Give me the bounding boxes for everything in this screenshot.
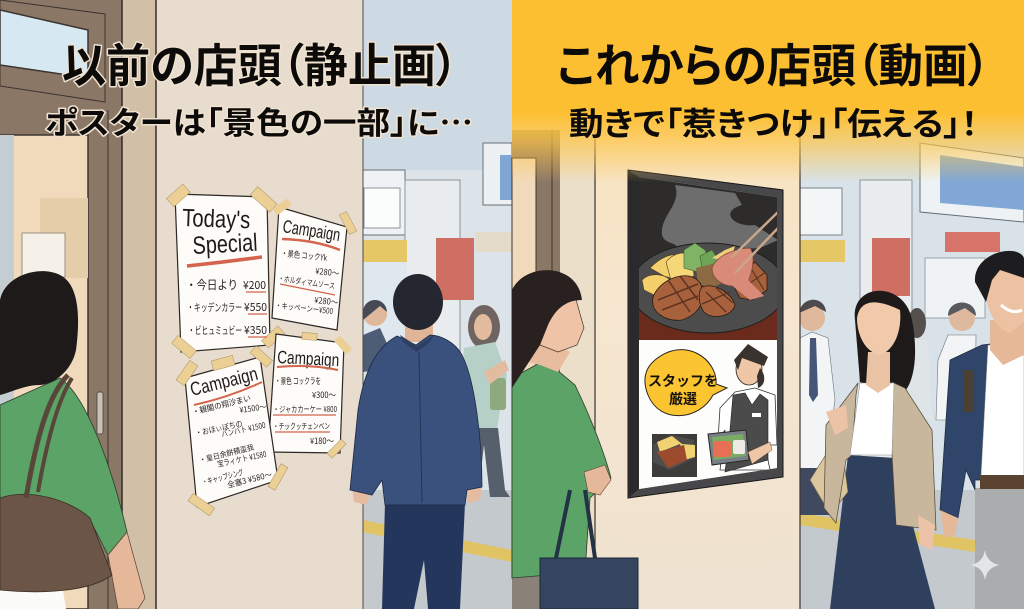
wall left xyxy=(156,0,363,609)
poster: Today's Special: ¥350 xyxy=(244,322,267,338)
title: future storefront: これからの店頭（動画） xyxy=(557,30,990,96)
video: staff recommendation xyxy=(639,340,777,490)
poster: Campaign lower right: ・ジャカカーケー ¥800 xyxy=(273,404,337,415)
door column xyxy=(122,0,156,609)
poster: Campaign lower right: Campaign xyxy=(277,347,340,370)
panel: future storefront (right) xyxy=(512,0,1024,609)
yellow header band xyxy=(512,0,1024,182)
poster: Today's Special: ・キッデンカラー xyxy=(187,300,242,315)
poster: Campaign bottom left: ・キャップシング xyxy=(201,467,244,488)
poster: Campaign bottom left: ・おほぃぼちの xyxy=(194,418,244,439)
poster: Campaign bottom left: ・親閣の翔沙まい xyxy=(191,393,252,418)
digital signage screen xyxy=(628,169,784,499)
poster: Today's Special: ・ビヒュミュビー xyxy=(188,323,242,338)
subtitle: previous storefront: ポスターは「景色の一部」に… xyxy=(45,98,473,143)
poster: Campaign top right: Campaign xyxy=(281,216,342,245)
poster: Campaign lower right: ・チックッチェンベン xyxy=(273,421,330,432)
station background right xyxy=(800,0,1024,609)
poster: Today's Special: ¥200 xyxy=(243,277,266,293)
woman in green cardigan looking at screen xyxy=(512,270,638,609)
title: previous storefront: 以前の店頭（静止画） xyxy=(62,30,458,96)
poster: Campaign top right: ・景色 コックYk xyxy=(281,247,328,264)
poster: Today's Special: ¥550 xyxy=(244,299,267,315)
poster: Campaign lower right xyxy=(268,332,352,458)
poster: Campaign bottom left xyxy=(176,346,288,516)
video: staff recommendation: スタッフを xyxy=(648,371,718,391)
door frame right xyxy=(512,0,800,609)
poster: Campaign top right: ・キッペーンー¥500 xyxy=(275,300,334,317)
poster: Campaign lower right: ・景色 コックラを xyxy=(275,375,321,387)
poster: Campaign top right: ・ホルダィマムソース xyxy=(278,273,336,292)
subtitle: future storefront: 動きで「惹きつけ」「伝える」！ xyxy=(569,99,978,145)
woman walking from behind xyxy=(0,271,145,609)
wall right xyxy=(595,0,800,609)
background commuters right xyxy=(799,300,976,515)
poster: Today's Special: Today's xyxy=(182,204,251,234)
sparkle watermark xyxy=(970,550,1000,580)
poster: Today's Special: ・今日より xyxy=(186,276,238,293)
poster: Campaign bottom left: ¥1500～ xyxy=(239,401,267,416)
man in navy blazer xyxy=(940,251,1024,609)
poster: Today's Special: Special xyxy=(192,229,258,260)
poster: Campaign bottom left: 宝ラィケト ¥1580 xyxy=(216,449,268,470)
poster: Campaign top right xyxy=(272,199,357,330)
station background left xyxy=(363,0,512,609)
poster: Campaign lower right: ¥300～ xyxy=(312,389,336,401)
poster: Campaign bottom left: バンバト ¥1500 xyxy=(220,420,267,440)
poster: Today's Special xyxy=(166,184,285,359)
door frame and window xyxy=(0,0,363,609)
woman in beige blazer xyxy=(810,291,936,609)
background commuters left xyxy=(363,300,510,497)
poster: Campaign bottom left: Campaign xyxy=(188,364,260,401)
poster: Campaign top right: ¥280～ xyxy=(315,265,340,280)
poster: Campaign bottom left: ・皇日余餅積盃我 xyxy=(198,442,256,466)
poster: Campaign top right: ¥280～ xyxy=(314,294,339,309)
video: staff recommendation: 厳選 xyxy=(669,389,697,409)
man in navy suit from behind xyxy=(350,274,482,609)
video: steak on hot plate xyxy=(639,177,777,340)
poster: Campaign lower right: ¥180～ xyxy=(310,435,334,447)
poster: Campaign bottom left: 全塞3 ¥580～ xyxy=(226,469,273,491)
panel: previous storefront (left) xyxy=(0,0,512,609)
